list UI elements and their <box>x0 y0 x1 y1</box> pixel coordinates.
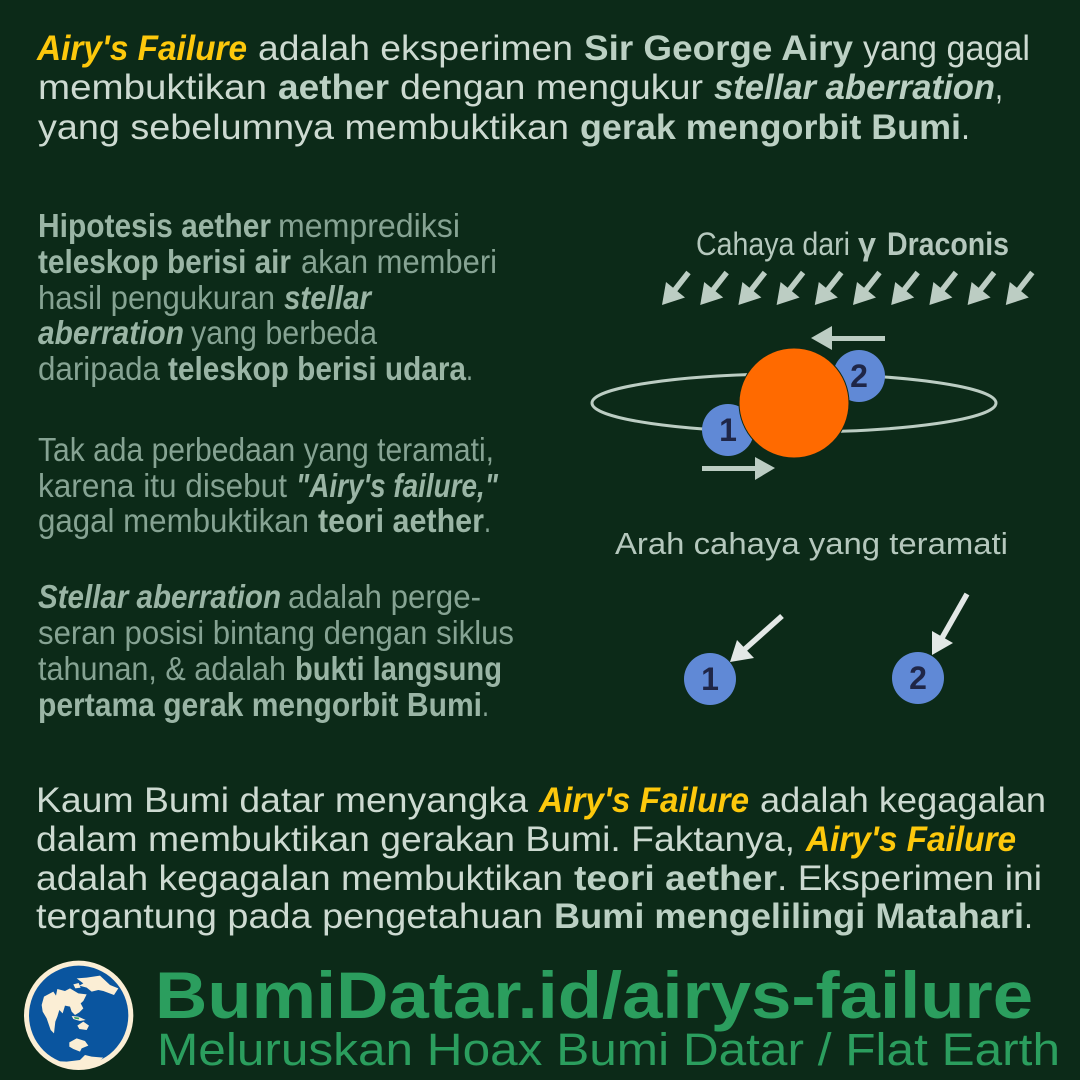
paragraph: aether hypothesis: teleskop berisi air <box>38 243 291 280</box>
conclusion text block: adalah kegagalan membuktikan <box>36 859 563 898</box>
footer URL: BumiDatar.id/airys-failure <box>155 958 1033 1032</box>
paragraph: stellar aberration definition <box>38 578 514 723</box>
sun <box>740 348 848 458</box>
paragraph: stellar aberration definition: . <box>482 686 489 723</box>
intro text block: Sir George Airy <box>584 29 854 68</box>
intro text block: yang gagal <box>863 29 1030 68</box>
arrow: orbit direction right <box>702 457 775 480</box>
paragraph: no difference observed: karena itu disebut <box>38 467 287 504</box>
conclusion text block <box>36 781 1046 936</box>
paragraph: aether hypothesis: memprediksi <box>278 207 460 244</box>
intro text block: yang sebelumnya membuktikan <box>38 108 569 147</box>
heading: light source: Draconis <box>887 226 1009 262</box>
orbit diagram <box>592 226 1032 705</box>
intro text block: membuktikan <box>38 68 267 107</box>
observed position 1: 1 <box>701 661 719 697</box>
conclusion text block: teori aether <box>574 859 777 898</box>
left text column <box>38 207 514 723</box>
arrow: orbit direction left <box>811 326 885 350</box>
paragraph: aether hypothesis: . <box>466 350 473 387</box>
paragraph: aether hypothesis <box>38 207 497 387</box>
paragraph: no difference observed: Tak ada perbedaan yang teramati, <box>38 431 494 468</box>
earth position 2 disc <box>833 350 885 402</box>
intro text block: aether <box>278 68 389 107</box>
paragraph: stellar aberration definition: tahunan, & adalah <box>38 650 286 687</box>
paragraph: stellar aberration definition: adalah perge- <box>288 578 481 615</box>
number 2: 2 <box>850 358 868 394</box>
light ray arrows <box>662 272 1032 305</box>
icon: globe logo <box>24 961 133 1070</box>
number 1: 1 <box>719 412 737 448</box>
observed position 2 <box>892 594 967 704</box>
paragraph: no difference observed: teori aether <box>318 502 484 539</box>
paragraph: stellar aberration definition: bukti langsung <box>295 650 502 687</box>
conclusion text block: adalah kegagalan <box>760 781 1046 820</box>
conclusion text block: Bumi mengelilingi Matahari <box>554 897 1024 936</box>
intro text block: stellar aberration <box>714 68 995 107</box>
paragraph: no difference observed <box>38 431 498 539</box>
intro text block: dengan mengukur <box>400 68 703 107</box>
conclusion text block: Airy's Failure <box>538 781 749 820</box>
footer tagline: Meluruskan Hoax Bumi Datar / Flat Earth <box>157 1024 1060 1075</box>
heading: observed direction: Arah cahaya yang teramati <box>615 526 1008 561</box>
intro text block: . <box>961 108 970 147</box>
earth position 1 disc <box>702 404 754 456</box>
paragraph: aether hypothesis: hasil pengukuran <box>38 279 275 316</box>
intro text block: adalah eksperimen <box>258 29 573 68</box>
observed position 2: 2 <box>909 660 927 696</box>
paragraph: no difference observed: gagal membuktikan <box>38 502 309 539</box>
paragraph: aether hypothesis: aberration <box>38 314 184 351</box>
intro text block: , <box>995 68 1003 107</box>
conclusion text block: Kaum Bumi datar menyangka <box>36 781 529 820</box>
conclusion text block: dalam membuktikan gerakan Bumi. Faktanya, <box>36 820 795 859</box>
paragraph: aether hypothesis: yang berbeda <box>191 314 378 351</box>
paragraph: aether hypothesis: daripada <box>38 350 161 387</box>
paragraph: stellar aberration definition: Stellar aberration <box>38 578 281 615</box>
paragraph: aether hypothesis: stellar <box>284 279 373 316</box>
paragraph: stellar aberration definition: seran posisi bintang dengan siklus <box>38 614 514 651</box>
intro text block: gerak mengorbit Bumi <box>580 108 961 147</box>
orbit ellipse <box>592 374 996 432</box>
conclusion text block: . <box>1024 897 1033 936</box>
paragraph: no difference observed: . <box>484 502 491 539</box>
conclusion text block: Airy's Failure <box>805 820 1016 859</box>
paragraph: no difference observed: "Airy's failure," <box>296 467 498 504</box>
conclusion text block: tergantung pada pengetahuan <box>36 897 543 936</box>
paragraph: aether hypothesis: Hipotesis aether <box>38 207 271 244</box>
intro text block <box>36 29 1030 147</box>
conclusion text block: . Eksperimen ini <box>777 859 1042 898</box>
heading: light source <box>696 226 1009 262</box>
heading: light source: γ <box>858 226 876 262</box>
intro text block: Airy's Failure <box>36 29 247 68</box>
heading: light source: Cahaya dari <box>696 226 850 262</box>
paragraph: aether hypothesis: akan memberi <box>301 243 497 280</box>
paragraph: stellar aberration definition: pertama gerak mengorbit Bumi <box>38 686 482 723</box>
observed position 1 <box>684 616 782 705</box>
paragraph: aether hypothesis: teleskop berisi udara <box>168 350 467 387</box>
